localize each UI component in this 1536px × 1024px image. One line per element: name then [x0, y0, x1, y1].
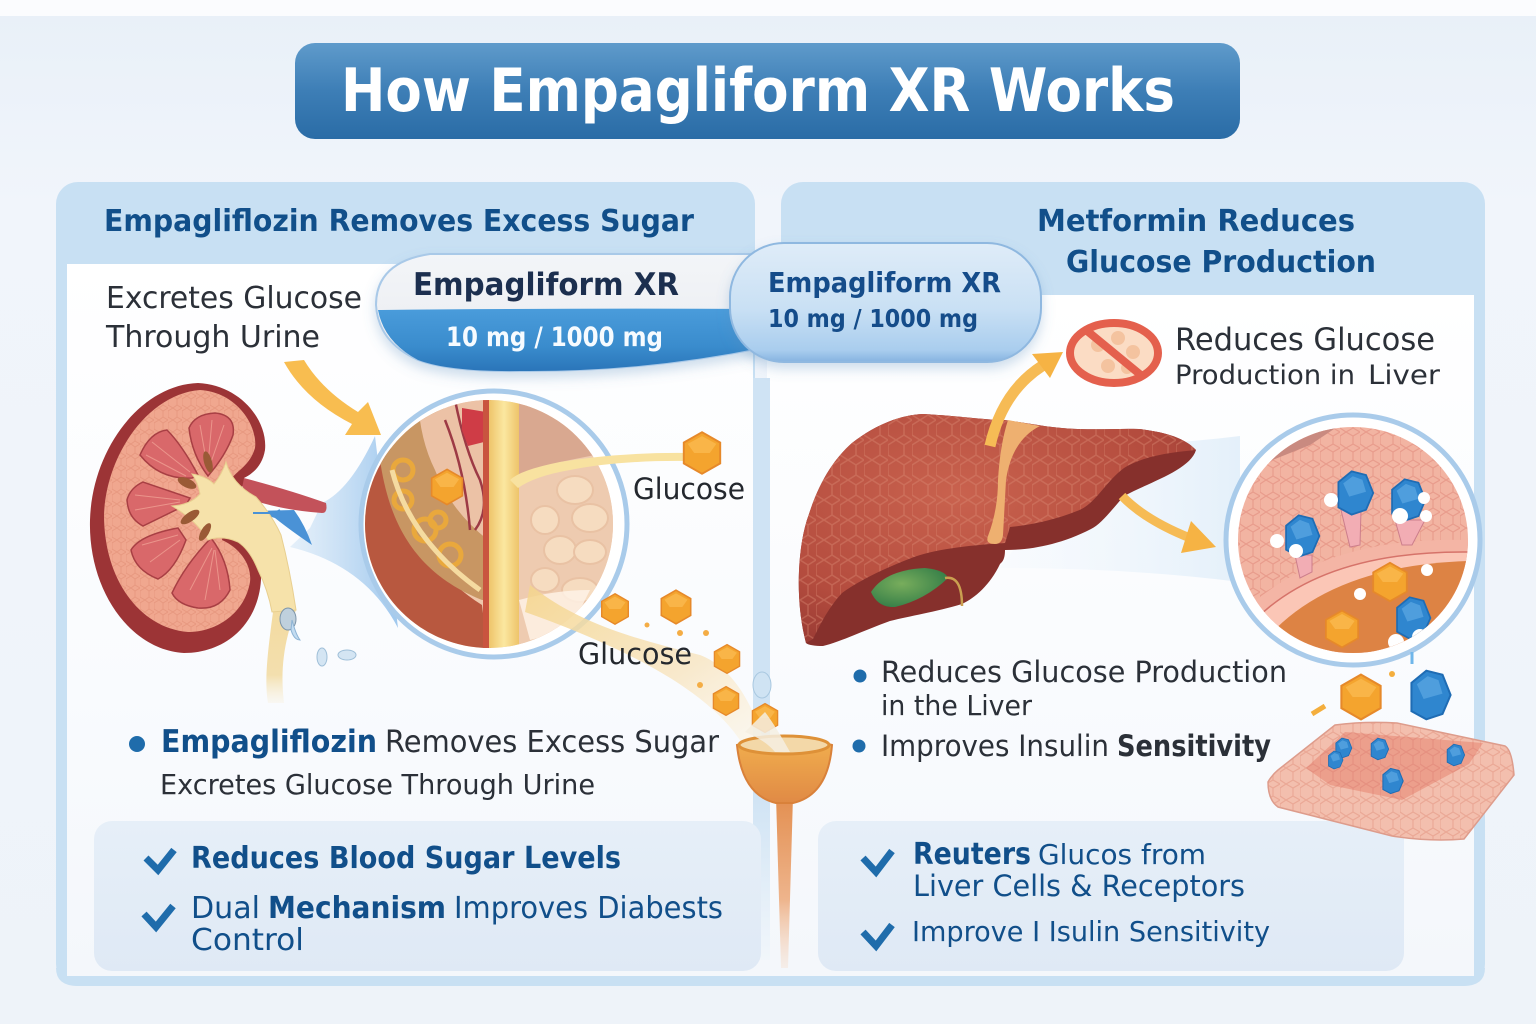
callout: right benefits: Improve I Isulin Sensitivity [912, 915, 1270, 948]
text: reduces glucose in liver [1175, 322, 1441, 391]
callout: right benefits: Liver Cells & Receptors [913, 869, 1245, 903]
panel heading: metformin: Glucose Production [1066, 245, 1376, 280]
pill: left tablet: Empagliform XR [413, 267, 679, 303]
bullets: metformin: in the Liver [881, 689, 1032, 722]
icon: no glucose production [1070, 322, 1158, 384]
bullets: metformin [852, 655, 1287, 763]
icon: collection cup [737, 712, 832, 968]
label: glucose top: Glucose [633, 472, 745, 506]
icon: check [146, 850, 174, 870]
callout: right benefits: Glucos from [1038, 838, 1206, 871]
bullet text: empagliflozin: Empagliflozin [161, 724, 377, 760]
panel heading: metformin: Metformin Reduces [1037, 204, 1355, 239]
pill: right tablet: Empagliform XR [768, 266, 1001, 299]
callout: left benefits: Control [191, 923, 304, 958]
bullets: metformin: Sensitivity [1117, 729, 1271, 763]
beam: kidney to magnifier [290, 436, 398, 628]
pill: right tablet: 10 mg / 1000 mg [768, 304, 978, 333]
callout: left benefits [94, 821, 761, 971]
icon: liver [799, 414, 1196, 646]
text: reduces glucose in liver: Liver [1368, 360, 1441, 391]
callout: right benefits: Reuters [913, 837, 1031, 872]
stream: glucose to cup [525, 585, 765, 748]
title banner: How Empagliform XR Works [341, 56, 1175, 126]
icons: falling glucose [602, 590, 778, 732]
magnifier: kidney nephron detail [360, 391, 627, 657]
arrow: liver to magnifier [1122, 496, 1216, 553]
text: excretes glucose: Through Urine [105, 320, 320, 355]
panel heading: empagliflozin: Empagliflozin Removes Excess Sugar [104, 204, 694, 239]
bullet text: empagliflozin: Excretes Glucose Through Urine [160, 768, 595, 801]
panel: metformin [56, 182, 1485, 986]
icon: insulin tissue block [1268, 722, 1514, 840]
arrow: to magnifier [284, 360, 381, 435]
callout: left benefits: Reduces Blood Sugar Levels [191, 841, 621, 876]
callout: left benefits: Dual [191, 891, 260, 926]
band: liver to magnifier [1000, 436, 1240, 582]
bullets: metformin: Reduces Glucose Production [881, 655, 1287, 689]
pill: left tablet: 10 mg / 1000 mg [446, 322, 663, 353]
bullets: metformin: Improves Insulin [881, 729, 1109, 763]
icons: glucose and insulin above block [1312, 652, 1451, 719]
callout: left benefits: Improves Diabests [454, 891, 723, 926]
bullet text: empagliflozin [129, 724, 720, 801]
arrow: liver to no-glucose icon [990, 352, 1063, 446]
text: excretes glucose: Excretes Glucose [106, 281, 362, 316]
icon: kidney [90, 383, 356, 703]
callout: right benefits [818, 821, 1404, 971]
text: excretes glucose [105, 281, 362, 355]
icon: glucose hexagon top [684, 432, 720, 474]
text: reduces glucose in liver: Reduces Glucose [1175, 322, 1435, 358]
glucose line to hexagon [510, 453, 690, 488]
pill: left tablet [376, 254, 775, 371]
text: reduces glucose in liver: Production in [1175, 360, 1355, 391]
callout: left benefits: Mechanism [268, 891, 446, 926]
magnifier: liver cell detail [1226, 415, 1480, 665]
panel heading: metformin [1037, 204, 1376, 280]
title banner [295, 43, 1240, 139]
bullet text: empagliflozin: Removes Excess Sugar [385, 725, 720, 760]
label: glucose bottom: Glucose [578, 637, 692, 671]
pill: right tablet [730, 243, 1041, 362]
